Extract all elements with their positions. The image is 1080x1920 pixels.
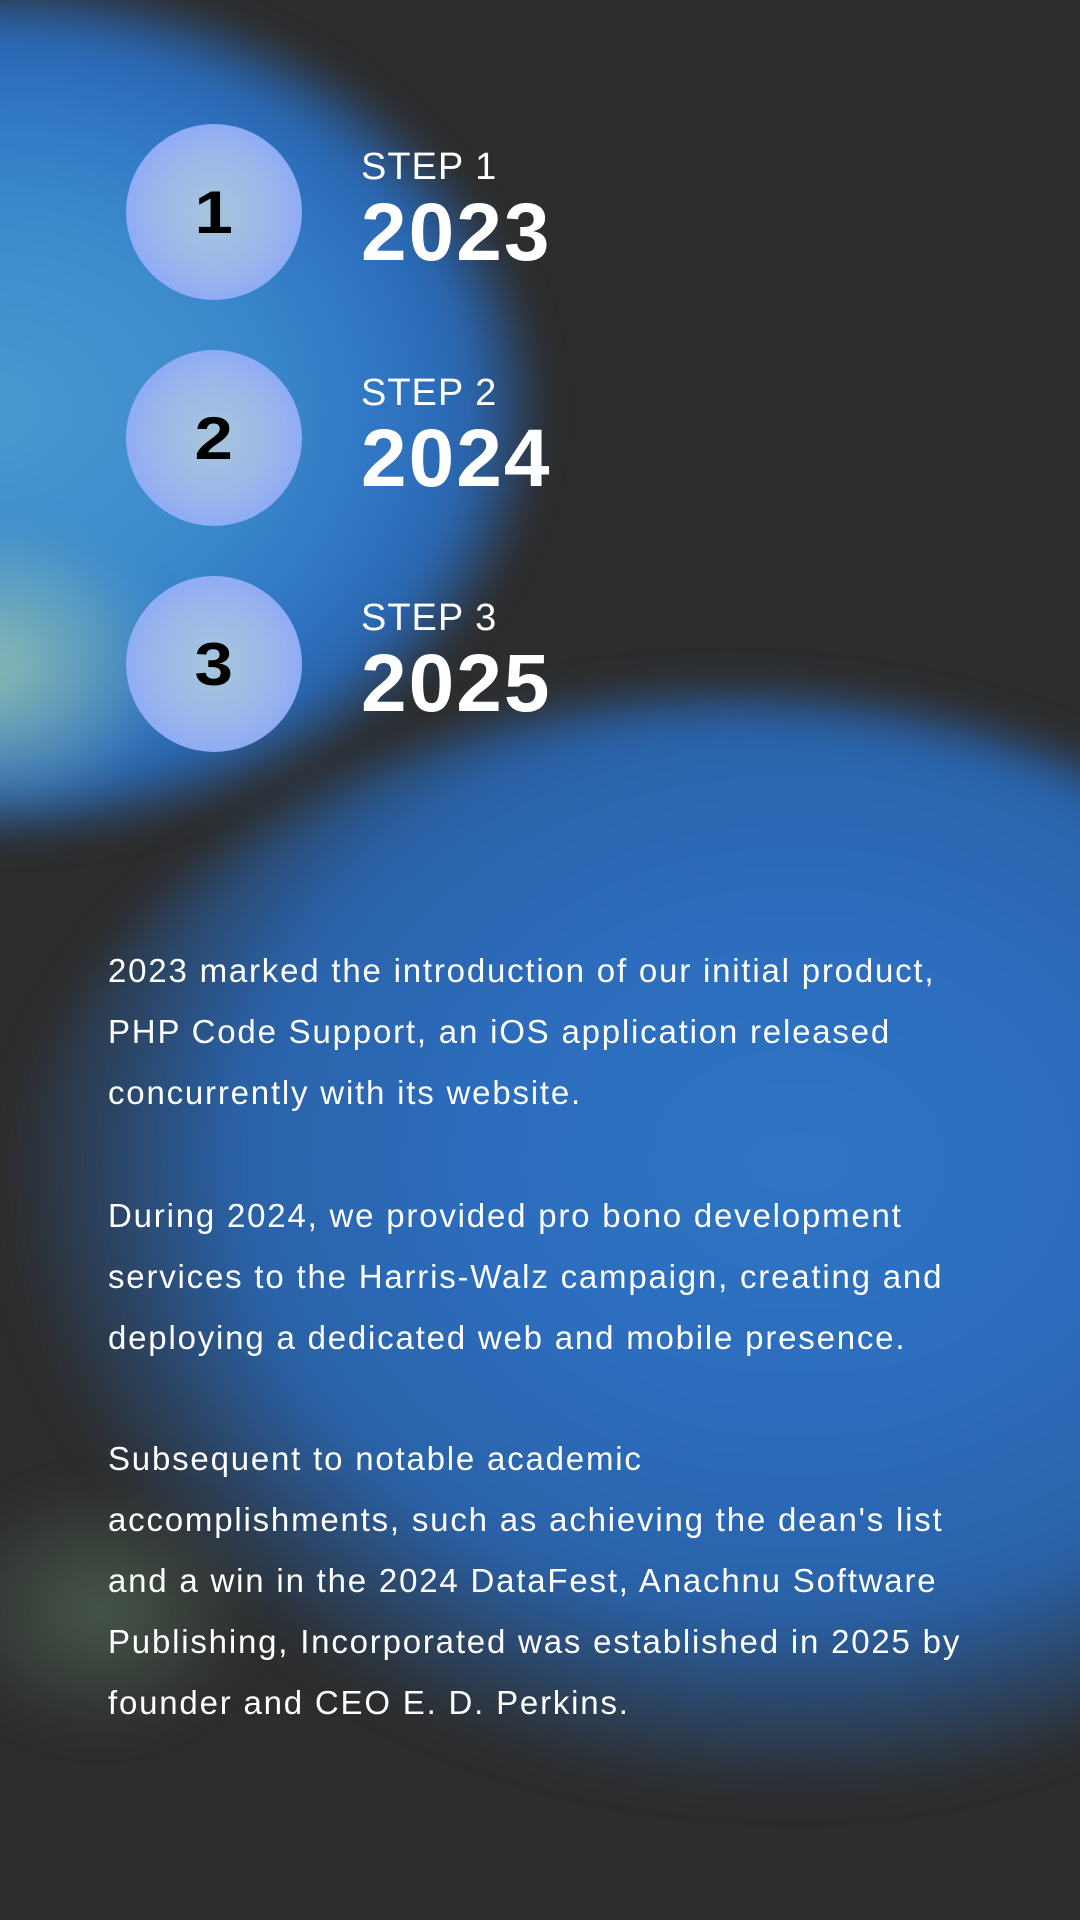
step 1 text: [361, 146, 551, 278]
paragraph: 2025: and a win in the 2024 DataFest, Anachnu Software: [108, 1562, 937, 1599]
paragraph: 2025: Publishing, Incorporated was established in 2025 by: [108, 1623, 961, 1660]
step 3 circle: 3: [195, 630, 233, 698]
step 3 text: STEP 3: [361, 597, 497, 639]
background glow: bottom: [0, 700, 1080, 1800]
step 2 text: 2024: [361, 413, 551, 504]
paragraph: 2023: concurrently with its website.: [108, 1074, 582, 1111]
paragraph: 2023: PHP Code Support, an iOS application released: [108, 1013, 891, 1050]
paragraph: 2025: accomplishments, such as achieving the dean's list: [108, 1501, 944, 1538]
paragraph: 2025: Subsequent to notable academic: [108, 1440, 643, 1477]
paragraph: 2024: services to the Harris-Walz campaign, creating and: [108, 1258, 943, 1295]
background glow: green tint lower-left: [0, 520, 180, 820]
step 3 text: [361, 597, 551, 729]
step 1 circle: [126, 124, 302, 300]
background glow: top-left: [0, 0, 540, 840]
step 3 circle: [126, 576, 302, 752]
paragraph: 2025: founder and CEO E. D. Perkins.: [108, 1684, 630, 1721]
paragraph: 2023: [108, 952, 935, 1111]
background glow: bottom-left green tint: [0, 1480, 260, 1740]
step 1 text: 2023: [361, 187, 551, 278]
paragraph: 2024: deploying a dedicated web and mobile presence.: [108, 1319, 906, 1356]
paragraph: 2024: During 2024, we provided pro bono development: [108, 1197, 903, 1234]
paragraph: 2025: [108, 1440, 961, 1721]
step 2 text: STEP 2: [361, 372, 497, 414]
paragraph: 2023: 2023 marked the introduction of our initial product,: [108, 952, 935, 989]
step 2 text: [361, 372, 551, 504]
step 3 text: 2025: [361, 638, 551, 729]
step 1 text: STEP 1: [361, 146, 497, 188]
step 1 circle: 1: [195, 178, 233, 246]
step 2 circle: 2: [195, 404, 233, 472]
step 2 circle: [126, 350, 302, 526]
paragraph: 2024: [108, 1197, 943, 1356]
